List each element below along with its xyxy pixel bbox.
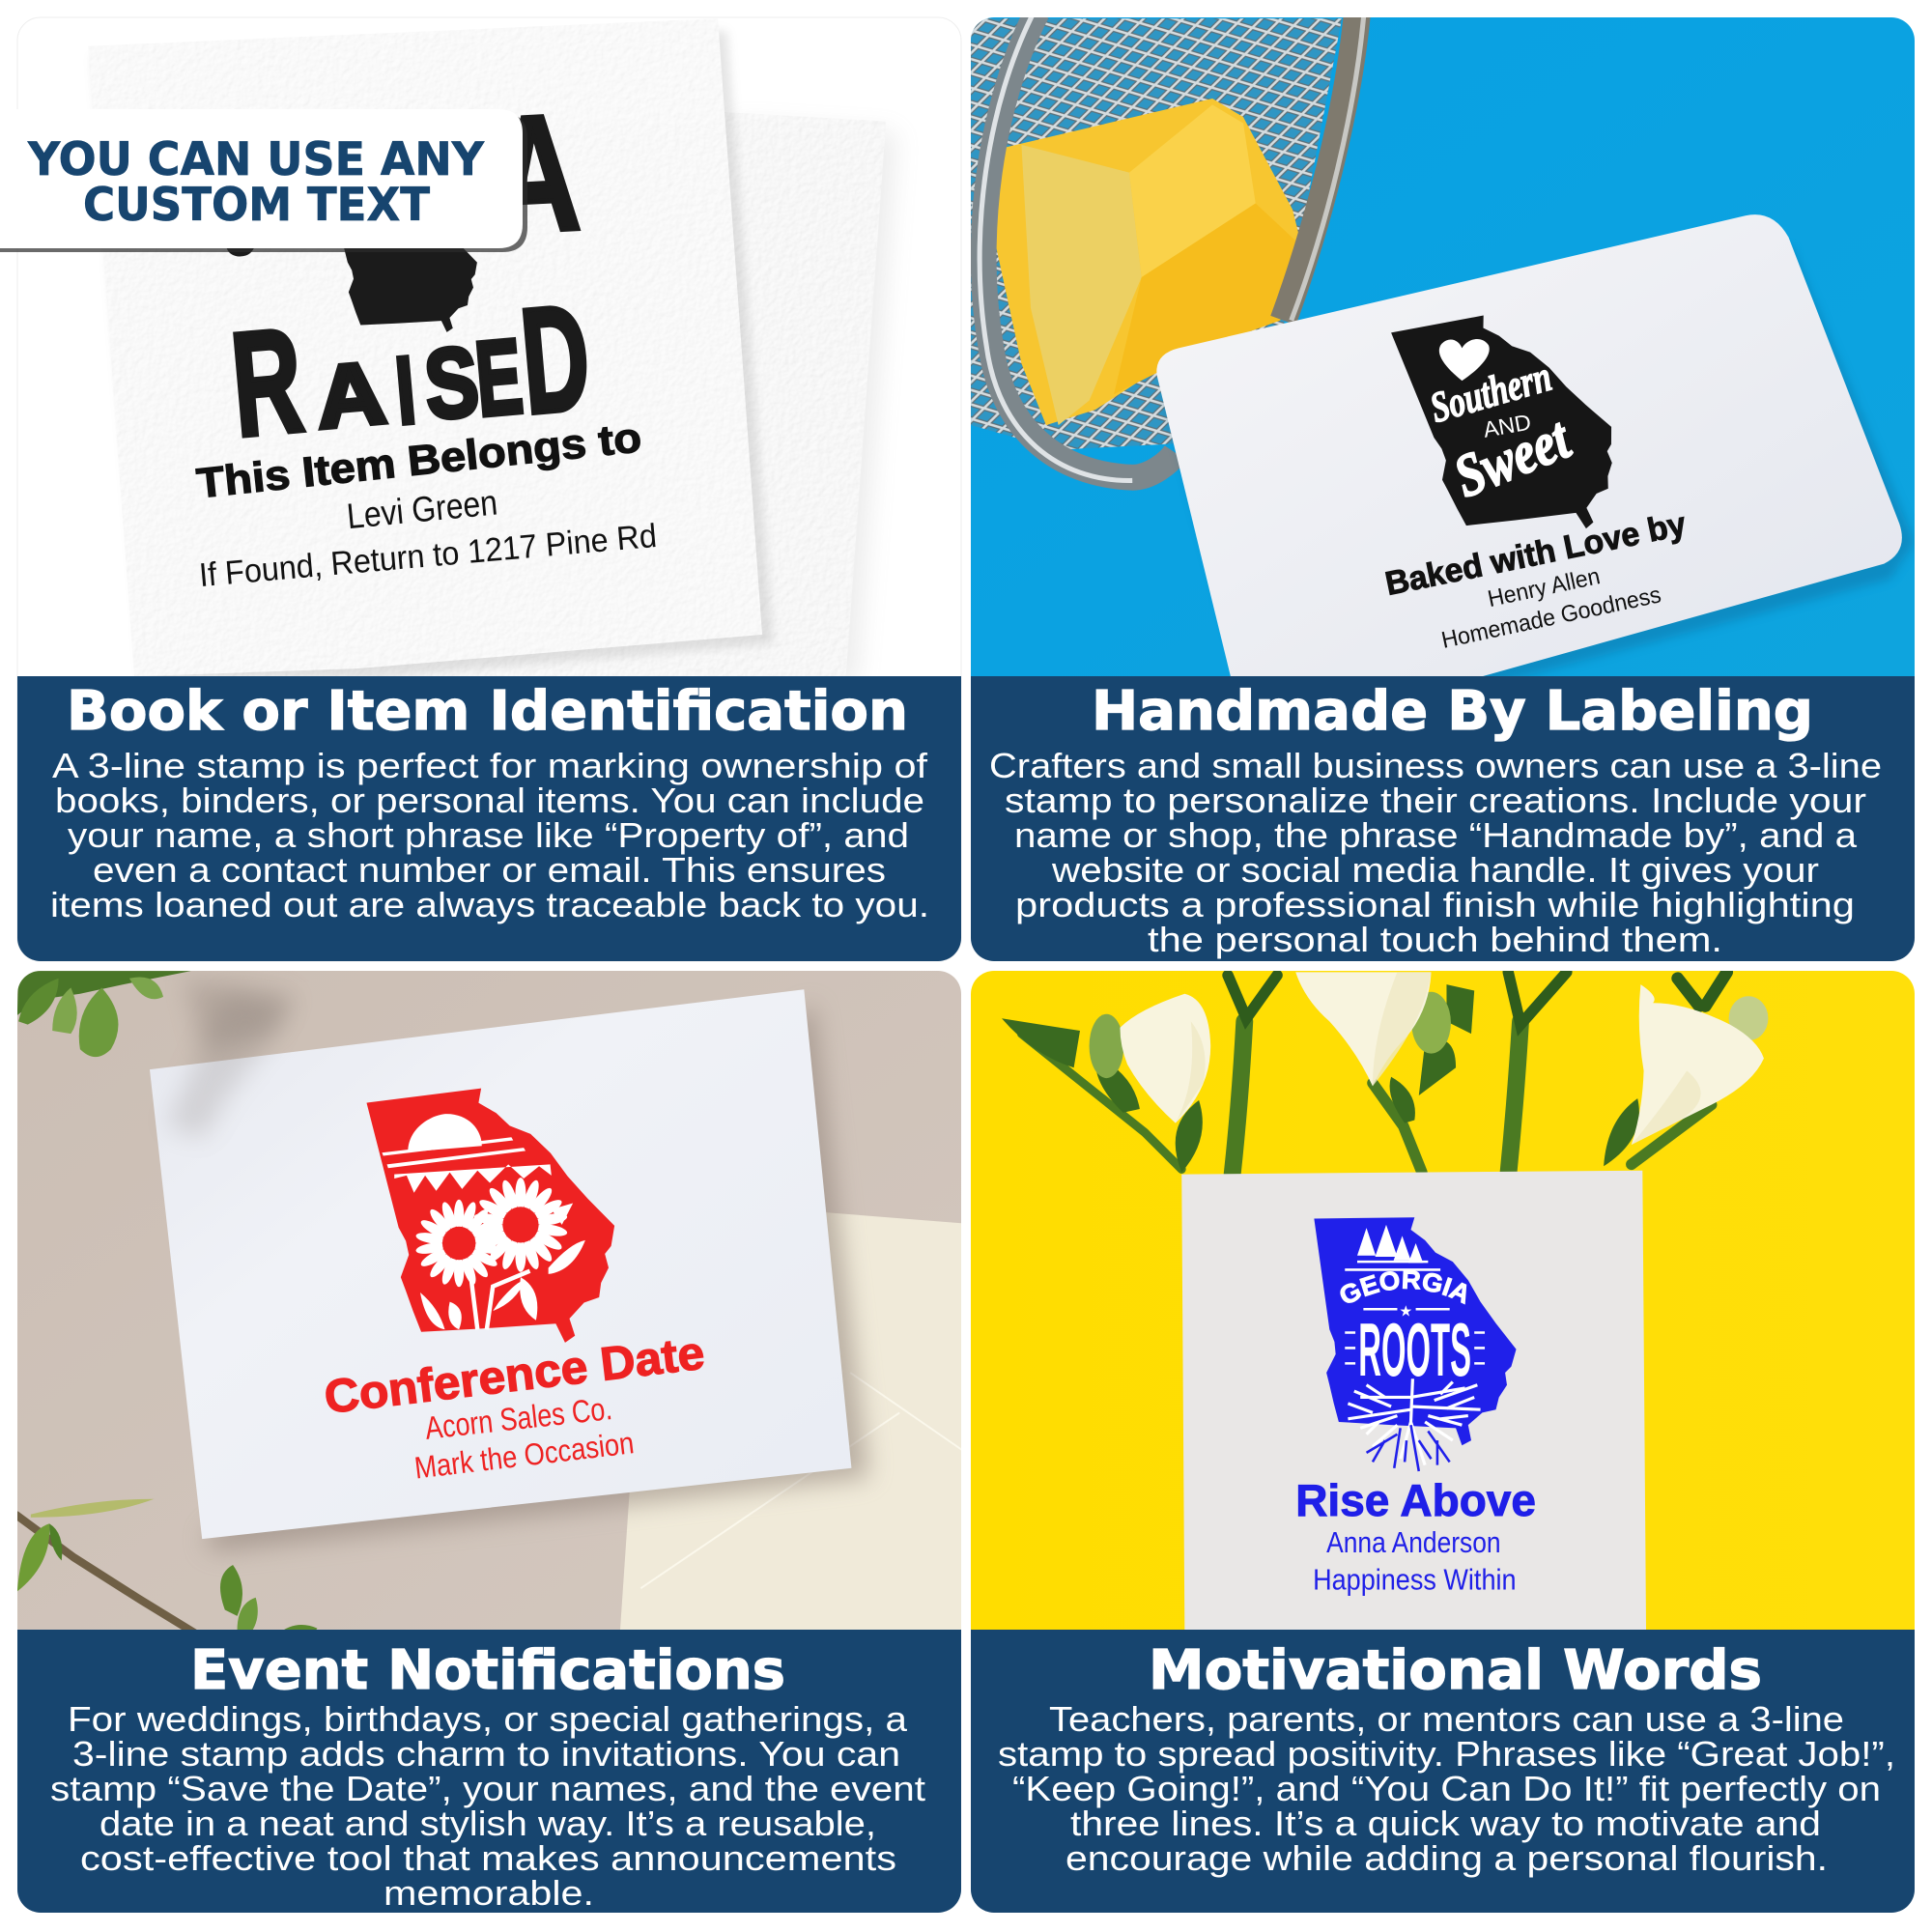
stamp: text lines: This Item Belongs to	[194, 414, 643, 507]
body text: date in a neat and stylish way. It’s a reusable,	[99, 1804, 876, 1843]
crumpled yellow paper	[991, 99, 1302, 425]
stamp: text lines	[1295, 1475, 1536, 1596]
body text: items loaned out are always traceable back to you.	[50, 885, 929, 924]
stamp: state silhouette with Georgia Roots art: ROOTS	[1358, 1309, 1471, 1392]
heading: Book or Item Identification	[67, 680, 908, 743]
stamp: RAISED lettering: A	[488, 80, 583, 269]
stamp: RAISED lettering: R	[226, 298, 309, 468]
stamp: text lines: Anna Anderson	[1326, 1526, 1501, 1559]
panel: event notifications	[0, 966, 966, 1913]
body text: Crafters and small business owners can use a 3-line	[989, 746, 1882, 785]
callout badge: custom text	[0, 109, 527, 252]
stamp: text lines: If Found, Return to 1217 Pine Rd	[198, 518, 658, 594]
white card	[1181, 1171, 1646, 1644]
body text: your name, a short phrase like “Property of”, and	[68, 815, 909, 855]
branch and leaves bottom left	[15, 1499, 317, 1640]
body text: memorable.	[384, 1873, 594, 1913]
body text: stamp “Save the Date”, your names, and the event	[50, 1769, 925, 1808]
body text: 3-line stamp adds charm to invitations. You can	[72, 1734, 900, 1774]
stamp: RAISED lettering: A	[312, 343, 389, 447]
body text: website or social media handle. It gives your	[1051, 850, 1819, 890]
body text	[50, 746, 929, 924]
heading: Event Notifications	[190, 1639, 785, 1702]
stamp: text lines: Mark the Occasion	[412, 1425, 636, 1486]
body text: name or shop, the phrase “Handmade by”, and a	[1014, 815, 1858, 855]
stamp: text lines	[195, 427, 656, 586]
body text	[998, 1699, 1895, 1878]
stamp: text lines: Acorn Sales Co.	[423, 1391, 614, 1447]
stamp: RAISED lettering: I	[392, 336, 419, 444]
heading: Motivational Words	[1149, 1639, 1762, 1702]
stamp: state silhouette with heart and lettering	[1391, 315, 1612, 529]
body text: For weddings, birthdays, or special gatherings, a	[68, 1699, 908, 1739]
panel: motivational words	[971, 971, 1915, 1913]
caption block	[17, 676, 961, 961]
stamp: RAISED lettering: E	[471, 318, 526, 439]
stamp: text lines: Conference Date	[322, 1327, 707, 1424]
body text: encourage while adding a personal flourish.	[1065, 1838, 1828, 1878]
photo: yellow surface with white flowers and card	[971, 971, 1915, 1630]
stamp: state silhouette with Georgia Roots art: ★	[1399, 1303, 1412, 1320]
stamp: RAISED lettering	[233, 114, 587, 439]
stamp: state silhouette	[344, 248, 477, 332]
stamp: state silhouette with Georgia Roots art: GEORGIA	[1340, 1271, 1466, 1304]
stamp: state silhouette with heart and lettering: Sweet	[1445, 404, 1579, 510]
leaves and buds	[1002, 984, 1768, 1173]
photo: card on taupe surface with envelope and leaves	[0, 966, 966, 1644]
stamp: RAISED lettering: S	[420, 326, 483, 440]
body text: cost-effective tool that makes announcements	[80, 1838, 896, 1878]
body text: “Keep Going!”, and “You Can Do It!” fit perfectly on	[1012, 1769, 1881, 1808]
stamp: text lines	[322, 1327, 707, 1486]
photo: blue surface, basket and card	[966, 0, 1932, 690]
body text: books, binders, or personal items. You can include	[55, 781, 924, 820]
stamp: text lines: Homemade Goodness	[1439, 582, 1663, 654]
body text: A 3-line stamp is perfect for marking ownership of	[52, 746, 928, 785]
stamp: text lines: Baked with Love by	[1382, 506, 1689, 603]
stamp: state silhouette with sunflowers	[366, 1075, 627, 1362]
body text: stamp to personalize their creations. Include your	[1005, 781, 1866, 820]
stamp: text lines: Levi Green	[345, 482, 499, 536]
body text: three lines. It’s a quick way to motivate and	[1070, 1804, 1821, 1843]
body text	[50, 1699, 925, 1913]
caption block	[971, 1630, 1915, 1913]
panel: book or item identification	[17, 17, 961, 961]
basket rims	[1283, 13, 1357, 321]
body text: stamp to spread positivity. Phrases like “Great Job!”,	[998, 1734, 1895, 1774]
card shadow	[203, 1003, 868, 1551]
photo: stacked paper napkins with black stamp	[88, 18, 896, 684]
body text	[989, 746, 1882, 959]
body text: the personal touch behind them.	[1148, 920, 1722, 959]
envelope	[619, 1212, 966, 1644]
leaf shadows	[185, 979, 296, 1052]
body text: Teachers, parents, or mentors can use a 3-line	[1049, 1699, 1844, 1739]
caption block	[971, 676, 1915, 961]
stems	[1021, 972, 1727, 1176]
stamp: text lines	[1385, 516, 1685, 648]
white card	[1163, 246, 1915, 690]
callout badge: custom text: CUSTOM TEXT	[83, 179, 430, 232]
stamp: state silhouette with Georgia Roots art	[1314, 1217, 1517, 1472]
caption block	[17, 1630, 961, 1913]
leaves top left	[17, 971, 191, 1057]
body text: products a professional finish while highlighting	[1015, 885, 1855, 924]
heading: Handmade By Labeling	[1092, 680, 1813, 743]
stamp: state silhouette with heart and lettering: Southern	[1425, 352, 1556, 432]
stamp: text lines: Rise Above	[1295, 1475, 1536, 1525]
stamp: text lines: Happiness Within	[1313, 1563, 1517, 1596]
stamp: text lines: Henry Allen	[1486, 563, 1603, 612]
flower blossoms	[1120, 972, 1764, 1145]
white card	[150, 989, 851, 1539]
stamp: state silhouette with heart and lettering: AND	[1481, 410, 1533, 442]
panel: handmade by labeling	[966, 0, 1932, 961]
stamp: RAISED lettering: D	[515, 272, 596, 445]
callout badge: custom text: YOU CAN USE ANY	[27, 133, 485, 186]
body text: even a contact number or email. This ensures	[93, 850, 886, 890]
